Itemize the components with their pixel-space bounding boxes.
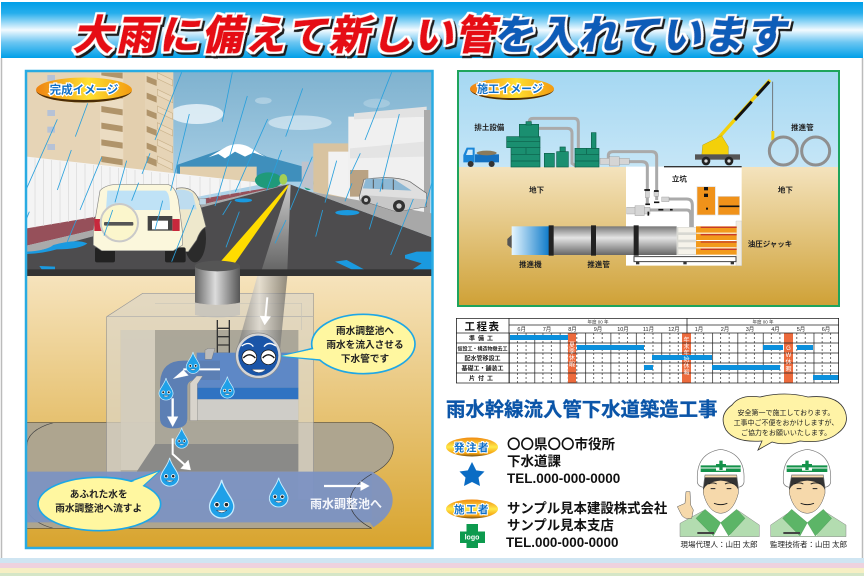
soil equipment — [507, 122, 599, 167]
labels: 排土設備 — [474, 122, 505, 132]
arrows — [167, 297, 369, 491]
icon: logo cross: logo — [465, 534, 479, 542]
jacking machine — [507, 225, 737, 264]
holiday labels: 末 — [683, 342, 690, 350]
badge: contractor: 施工者 — [454, 503, 490, 516]
callout: sewer pipe: 下水管です — [341, 353, 389, 365]
schedule bars — [510, 335, 839, 380]
truck — [463, 148, 499, 167]
holiday labels: 年 — [683, 336, 690, 344]
pipe fittings — [600, 157, 669, 216]
labels — [474, 122, 814, 269]
panel: construction image — [457, 70, 840, 307]
inlet pipe — [237, 276, 287, 350]
holiday labels: 休 — [683, 362, 690, 370]
road edge band — [27, 269, 432, 276]
street scene — [27, 72, 432, 276]
labels: 推進管 — [791, 122, 814, 132]
badge: contractor — [446, 500, 498, 518]
speech cloud: 工事中ご不便をおかけしますが、 — [734, 418, 838, 427]
month headers — [517, 326, 830, 333]
holiday columns — [568, 333, 793, 383]
title band — [1, 2, 863, 58]
month headers: 5月 — [797, 326, 805, 333]
worker 2 — [771, 449, 846, 537]
holiday labels: 暇 — [785, 366, 792, 373]
worker captions: 監理技術者：山田 太郎 — [770, 539, 848, 549]
road — [27, 184, 432, 270]
badge: completed image — [36, 78, 132, 102]
road pipe shadow — [262, 185, 291, 270]
icon: star — [460, 462, 484, 486]
apartment building — [27, 72, 173, 175]
holiday labels: 夏 — [569, 342, 575, 349]
road yellow line — [217, 185, 289, 265]
row labels: 基礎工・舗装工 — [461, 364, 504, 372]
van — [359, 178, 427, 212]
callout: overflow: あふれた水を — [70, 488, 128, 500]
holiday labels: 年 — [683, 349, 690, 357]
badge: completed image: 完成イメージ — [50, 82, 119, 96]
month headers: 12月 — [668, 326, 680, 333]
row labels: 配水管移設工 — [464, 354, 501, 362]
holiday labels: W — [786, 353, 792, 359]
label: to retention pond: 雨水調整池へ — [310, 496, 382, 511]
labels: 地下 — [778, 184, 793, 194]
chamber water — [197, 353, 298, 420]
client text: TEL.000-000-0000 — [507, 471, 620, 486]
labels: 立坑 — [672, 174, 687, 184]
labels: 推進機 — [519, 259, 542, 269]
client block — [446, 436, 620, 486]
month headers: 4月 — [771, 326, 780, 333]
mountain — [177, 144, 303, 182]
right buildings — [290, 107, 432, 237]
rain — [27, 72, 432, 262]
month headers: 3月 — [746, 326, 754, 333]
holiday labels: 休 — [569, 354, 575, 362]
chart heading: 工程表 — [464, 320, 500, 333]
big sewer pipe — [27, 423, 393, 528]
month headers: 2月 — [721, 326, 729, 333]
distant houses — [180, 167, 257, 182]
holiday labels: 始 — [683, 356, 690, 364]
speech cloud: 安全第一で施工しております。 — [738, 408, 834, 417]
month headers: 9月 — [594, 326, 602, 333]
month headers: 7月 — [543, 326, 551, 333]
icon: smiling pipe — [236, 333, 281, 378]
badge: client — [446, 438, 498, 456]
row labels: 片付工 — [469, 374, 496, 382]
schedule chart — [456, 318, 839, 383]
worker 1 — [677, 449, 759, 537]
underground section — [27, 261, 432, 548]
labels: 油圧ジャッキ — [748, 239, 792, 249]
row labels — [457, 334, 508, 382]
weir — [190, 348, 215, 421]
holiday labels: 暇 — [569, 362, 575, 368]
client text: 〇〇県〇〇市役所 — [507, 436, 615, 452]
panel border — [26, 71, 432, 548]
holiday labels: 休 — [785, 358, 792, 366]
contractor block — [446, 500, 668, 550]
callout: overflow: 雨水調整池へ流すよ — [55, 503, 142, 515]
callout: sewer pipe — [282, 314, 415, 374]
callout: sewer pipe: 雨水を流入させる — [326, 339, 404, 351]
project title: 雨水幹線流入管下水道築造工事 — [446, 398, 717, 421]
roadside fence — [27, 157, 288, 254]
holiday labels: 季 — [569, 348, 575, 356]
ladder — [217, 320, 229, 360]
pipes — [529, 118, 692, 228]
title text red second part: て新しい管 — [285, 12, 505, 58]
holiday labels — [569, 336, 792, 376]
manhole — [195, 261, 240, 317]
row labels: 準備工 — [469, 334, 496, 342]
client text: 下水道課 — [507, 453, 561, 469]
trees — [255, 172, 313, 190]
orange machines — [697, 187, 740, 215]
clouds — [170, 97, 390, 130]
title text blue: を入れています — [491, 12, 796, 58]
badge: client: 発注者 — [454, 441, 490, 454]
concrete box — [107, 293, 313, 500]
puddles — [27, 198, 432, 270]
contractor text: サンプル見本建設株式会社 — [507, 500, 668, 516]
white car — [93, 184, 206, 262]
overflow channel — [160, 361, 220, 428]
flowing water — [27, 472, 393, 527]
worker captions — [680, 539, 848, 549]
panel: completed image — [26, 71, 432, 548]
title text red: 大雨に備え — [71, 12, 296, 58]
holiday labels: G — [786, 346, 791, 352]
footer stripes — [0, 558, 864, 576]
year headers: 年度 00 年 — [587, 318, 609, 326]
callout: sewer pipe: 雨水調整池へ — [336, 325, 394, 337]
labels: 推進管 — [587, 259, 610, 269]
year headers: 年度 00 年 — [752, 318, 774, 326]
month headers: 10月 — [617, 326, 629, 333]
concrete rings — [769, 137, 830, 165]
water drops — [159, 352, 288, 518]
callout: overflow — [38, 471, 161, 531]
labels: 地下 — [529, 184, 545, 194]
month headers: 1月 — [695, 326, 703, 333]
shaft — [626, 167, 742, 266]
crane — [695, 80, 774, 165]
speech cloud: ご協力をお願いいたします。 — [741, 428, 831, 437]
month headers: 8月 — [568, 326, 577, 333]
icon: logo cross — [460, 524, 485, 548]
contractor text: TEL.000-000-0000 — [506, 535, 618, 550]
badge: construction image — [470, 78, 554, 100]
holiday labels: 暇 — [683, 370, 690, 376]
year headers — [587, 318, 774, 326]
contractor text: サンプル見本支店 — [507, 517, 614, 533]
worker captions: 現場代理人：山田 太郎 — [680, 539, 758, 549]
speech cloud — [723, 394, 846, 450]
month headers: 11月 — [643, 326, 654, 333]
badge: construction image: 施工イメージ — [477, 82, 543, 96]
month headers: 6月 — [517, 326, 526, 333]
row labels: 仮設工・構造物撤去工 — [457, 346, 508, 352]
month headers: 6月 — [822, 326, 830, 333]
